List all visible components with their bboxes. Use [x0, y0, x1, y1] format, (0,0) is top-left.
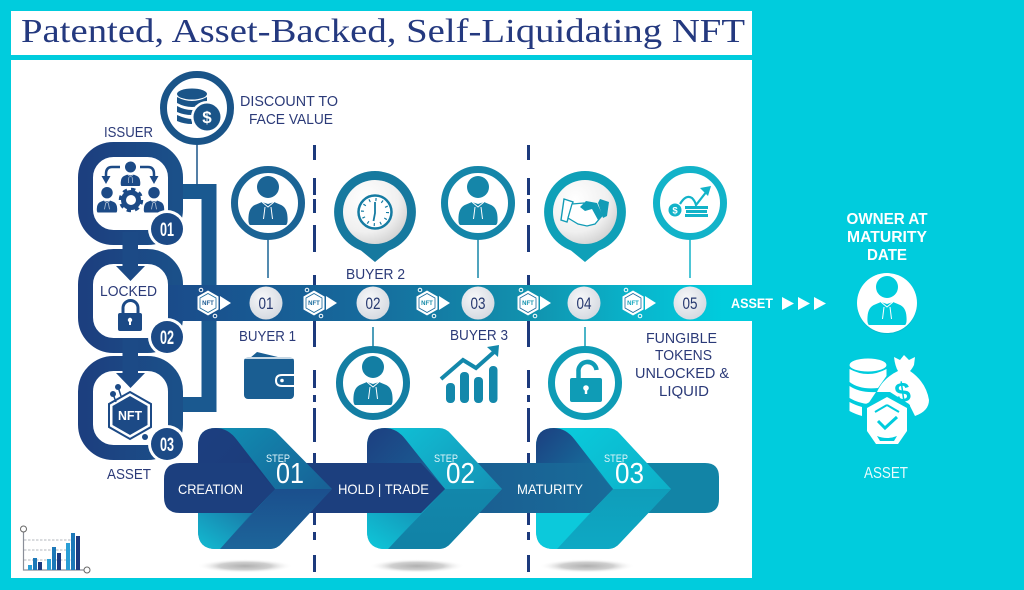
step shadows	[197, 559, 635, 573]
timeline numbers: 04	[576, 294, 592, 313]
owner heading: DATE	[867, 247, 907, 264]
timeline NFT markers: NFT	[421, 301, 433, 307]
title banner: Patented, Asset-Backed, Self-Liquidating NFT	[21, 13, 745, 50]
timeline numbers	[250, 286, 706, 320]
step labels: STEP	[434, 453, 458, 465]
bar asset label and arrows	[731, 295, 826, 311]
frame: issuer	[86, 150, 176, 238]
labels: ISSUER	[104, 124, 153, 141]
icon: asset coins and bag	[850, 355, 929, 447]
step labels: STEP	[604, 453, 628, 465]
labels: BUYER 2	[346, 266, 405, 283]
badge: 03	[148, 425, 186, 463]
step labels	[178, 453, 644, 497]
badge: 01	[148, 210, 186, 248]
badge: 02: 02	[160, 328, 174, 349]
timeline numbers: 05	[682, 294, 698, 313]
icon: buyer 3	[444, 170, 512, 278]
icon: coin growth: $	[672, 206, 678, 216]
bar asset label and arrows: ASSET	[731, 295, 773, 311]
badge: 02	[148, 318, 186, 356]
icon: NFT hexagon	[109, 384, 151, 440]
labels: DISCOUNT TO	[240, 93, 338, 110]
connector: discount line	[196, 140, 198, 186]
arrow: issuer to locked	[116, 232, 145, 281]
icon: open lock	[552, 327, 618, 416]
step 03 ribbon	[536, 428, 671, 549]
labels: UNLOCKED &	[635, 365, 729, 382]
icon: owner	[857, 273, 917, 334]
timeline numbers: 03	[470, 294, 486, 313]
step labels: 01	[276, 458, 304, 490]
timeline NFT markers: NFT	[308, 301, 320, 307]
step 01 ribbon	[198, 428, 332, 549]
step labels: 02	[446, 458, 475, 490]
badge: 01: 01	[160, 220, 174, 241]
icon: asset coins and bag: $	[893, 376, 913, 409]
step band: hold and trade	[275, 463, 445, 513]
icon: wallet	[244, 352, 294, 399]
step 02 ribbon	[367, 428, 502, 549]
icon: buyer 2	[340, 327, 406, 416]
icon: issuer team	[97, 162, 164, 212]
timeline NFT markers: NFT	[202, 301, 214, 307]
step labels: CREATION	[178, 481, 243, 497]
timeline NFT markers: NFT	[522, 301, 534, 307]
owner heading: OWNER AT	[846, 211, 928, 228]
step labels: HOLD | TRADE	[338, 481, 429, 497]
timeline NFT markers	[198, 288, 656, 318]
owner heading	[846, 211, 928, 264]
labels: FACE VALUE	[249, 111, 333, 128]
panel: main process	[11, 60, 752, 578]
icon: discount database coin	[164, 74, 230, 142]
icon: clock pin	[334, 171, 416, 262]
asset caption: ASSET	[864, 465, 908, 482]
step band tail	[600, 463, 719, 513]
icon: mini bar chart	[20, 526, 90, 573]
icon: discount database coin: $	[202, 108, 212, 127]
step band: creation	[164, 463, 275, 513]
icon: handshake pin	[544, 171, 626, 262]
connector: issuer frames to timeline	[175, 184, 216, 412]
icon: growth chart	[441, 345, 499, 403]
labels: LIQUID	[659, 383, 709, 400]
labels: BUYER 3	[450, 327, 508, 344]
labels: LOCKED	[100, 283, 157, 300]
owner heading: MATURITY	[847, 229, 928, 246]
dashed phase dividers	[313, 145, 530, 572]
step labels: STEP	[266, 453, 290, 465]
frame: locked	[86, 256, 176, 346]
badge: 03: 03	[160, 435, 174, 456]
arrow: locked to asset	[116, 338, 145, 388]
labels: ASSET	[107, 466, 151, 483]
timeline numbers: 01	[258, 294, 274, 313]
labels: TOKENS	[655, 347, 712, 364]
timeline NFT markers: NFT	[627, 301, 639, 307]
timeline bar	[168, 285, 752, 321]
labels	[100, 93, 729, 483]
step labels: 03	[615, 458, 644, 490]
timeline numbers: 02	[366, 294, 380, 313]
labels: FUNGIBLE	[646, 330, 717, 347]
icon: buyer 1	[234, 170, 302, 278]
step band: maturity	[445, 463, 613, 513]
frame: asset	[86, 364, 176, 452]
icon: coin growth	[656, 170, 724, 278]
labels: BUYER 1	[239, 328, 296, 345]
icon: NFT hexagon: NFT	[118, 408, 142, 423]
step labels: MATURITY	[517, 481, 584, 497]
icon: padlock	[118, 301, 142, 331]
